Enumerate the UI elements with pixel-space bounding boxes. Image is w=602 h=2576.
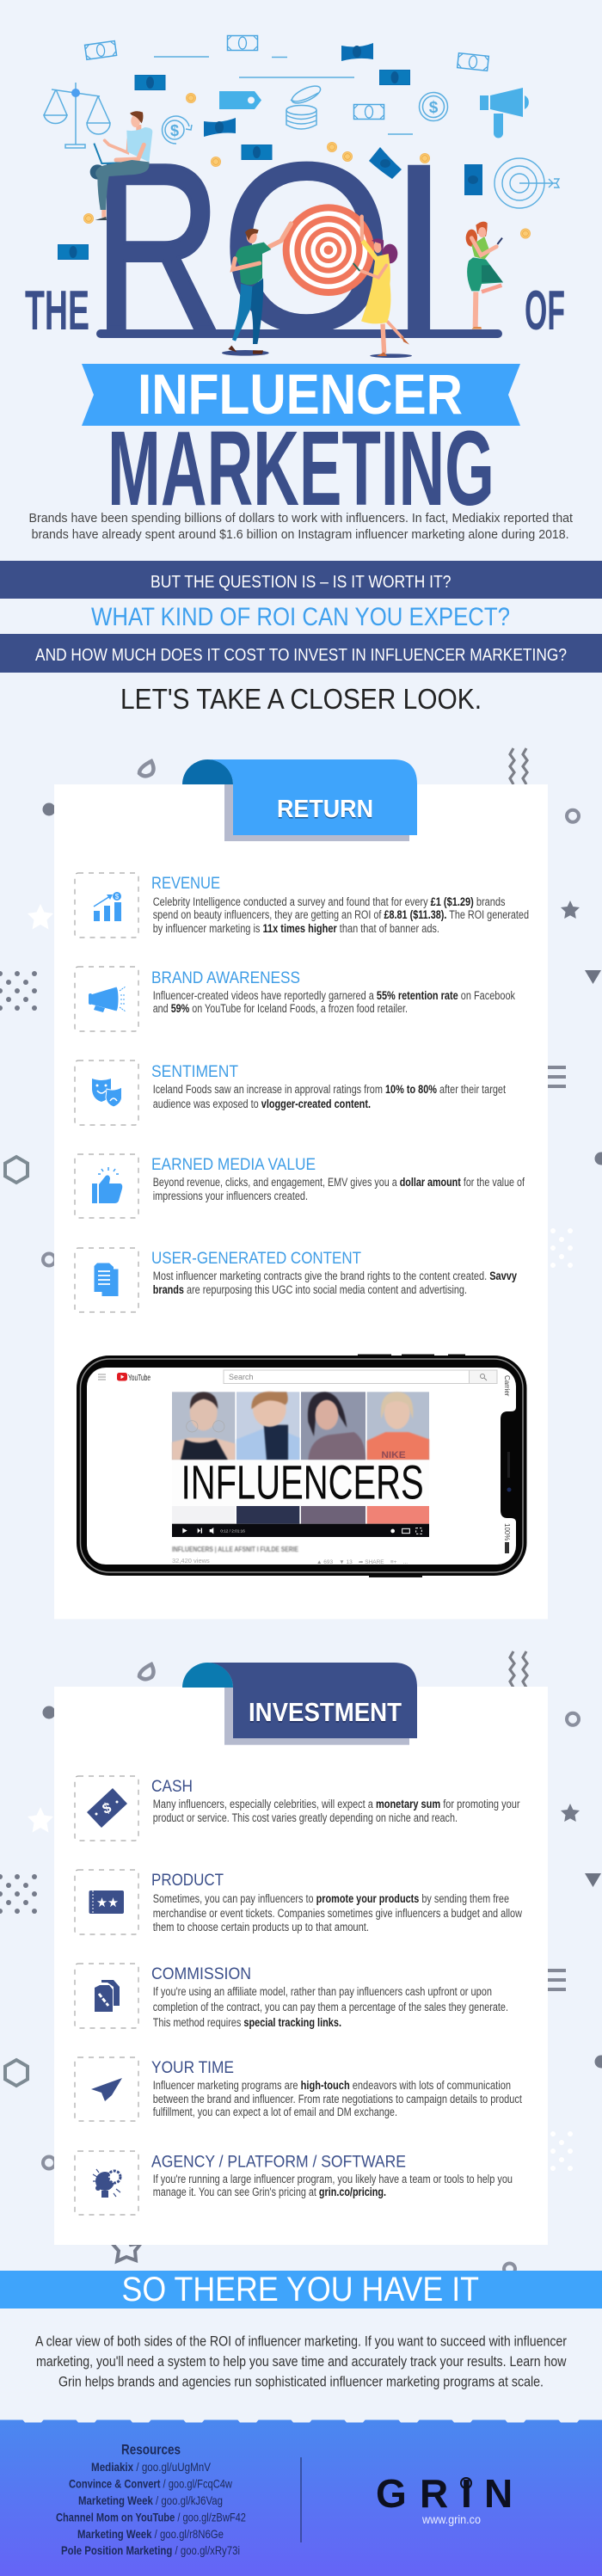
intro paragraph: Brands have been spending billions of dollars to work with influencers. In fact, Mediakix reported that: [29, 511, 574, 526]
item: revenue: spend on beauty influencers, they are getting an ROI of £8.81 ($11.38). The ROI generated: [153, 908, 529, 921]
video meta row: 32,420 views: [172, 1557, 210, 1565]
question bar 2: [0, 634, 602, 673]
video meta row: INFLUENCERS | ALLE AFSNIT I FULDE SERIE: [172, 1545, 298, 1553]
player controls: [172, 1524, 429, 1537]
closing banner: [0, 2271, 602, 2309]
item: sentiment: SENTIMENT: [151, 1063, 238, 1081]
panel: footer: [0, 2419, 602, 2576]
phone status text: 100%: [503, 1523, 511, 1540]
phone mockup with YouTube screen: [77, 1354, 526, 1577]
item: commission: This method requires special tracking links.: [153, 2016, 341, 2029]
item: brand awareness: and 59% on YouTube for Iceland Foods, a frozen food retailer.: [153, 1002, 408, 1015]
icon: theatre masks: [92, 1079, 122, 1107]
question bar 1: [0, 561, 602, 599]
tab: return: [182, 759, 417, 841]
tab: return: RETURN: [277, 796, 373, 823]
phone status text: Carrier: [503, 1375, 511, 1397]
ribbon text: INFLUENCER: INFLUENCER: [138, 363, 463, 426]
icon: revenue chart: $: [115, 893, 120, 901]
item: your time: between the brand and influencer. From rate negotiations to campaign details to product: [153, 2093, 522, 2106]
video meta row: ▲ 693 ▼ 13 ➦ SHARE ≡+ ...: [316, 1559, 408, 1565]
closing banner: SO THERE YOU HAVE IT: [122, 2271, 479, 2309]
youtube header: [98, 1370, 497, 1383]
icon: balance scale: [44, 83, 110, 148]
item: product: [75, 1870, 522, 1934]
hero money icons: $: [429, 99, 439, 117]
item: your time: fulfillment, you can expect a lot of email and DM exchange.: [153, 2106, 397, 2118]
icon: gear bulb: [93, 2169, 120, 2198]
resources list: Marketing Week / goo.gl/r8N6Ge: [77, 2527, 224, 2541]
resources list: Channel Mom on YouTube / goo.gl/zBwF42: [56, 2511, 246, 2524]
thumbnail title: INFLUENCERS: [181, 1455, 424, 1509]
item: your time: Influencer marketing programs are high-touch endeavors with lots of communication: [153, 2079, 511, 2092]
item: agency platform software: AGENCY / PLATFORM / SOFTWARE: [151, 2154, 406, 2171]
item: agency platform software: manage it. You can see Grin's pricing at grin.co/pricing.: [153, 2186, 386, 2198]
icon: ticket: [89, 1891, 124, 1914]
tab: return: RETURN: [277, 796, 373, 824]
resources list: Pole Position Marketing / goo.gl/xRy73i: [61, 2543, 240, 2557]
item: user-generated content: USER-GENERATED CONTENT: [151, 1250, 361, 1268]
tab: investment: INVESTMENT: [249, 1697, 402, 1727]
icon: documents: [95, 1263, 119, 1297]
tab: investment: [182, 1663, 417, 1745]
footer divider: [301, 2457, 302, 2542]
item: cash: [75, 1776, 520, 1841]
item: commission: If you're using an affiliate model, rather than pay influencers cash upfront or upon: [153, 1985, 492, 1998]
big ROI title letters: O: [220, 113, 393, 383]
closer look heading: LET'S TAKE A CLOSER LOOK.: [120, 684, 482, 716]
item: brand awareness: Influencer-created videos have reportedly garnered a 55% retention rate on Facebook: [153, 989, 515, 1002]
icon: revenue chart: [94, 892, 121, 921]
hero money icons: [58, 36, 530, 260]
item: user-generated content: [75, 1248, 517, 1313]
item: sentiment: audience was exposed to vlogger-created content.: [153, 1097, 371, 1110]
item: commission: [75, 1964, 508, 2029]
item: sentiment: [75, 1061, 506, 1125]
question heading: WHAT KIND OF ROI CAN YOU EXPECT?: [91, 603, 510, 631]
ribbon banner: [82, 363, 520, 426]
title word: THE: THE: [25, 279, 89, 341]
title word: OF: OF: [525, 279, 565, 341]
youtube header: Search: [229, 1373, 254, 1381]
item: cash: Many influencers, especially celebrities, will expect a monetary sum for promoting your: [153, 1798, 520, 1811]
website text: www.grin.co: [421, 2512, 481, 2526]
panel: return: [54, 759, 548, 1619]
resources list: Resources: [121, 2441, 181, 2458]
icon: thumbs up: [92, 1167, 122, 1203]
item: revenue: REVENUE: [151, 875, 220, 893]
icon: outline target with arrow: [494, 158, 559, 208]
video meta row: [172, 1545, 408, 1565]
illustration: archery target held by two people: [222, 204, 412, 358]
big ROI title letters: R: [94, 115, 222, 378]
item: user-generated content: brands are repurposing this UGC into social media content and advertising.: [153, 1283, 467, 1296]
item: your time: [75, 2057, 522, 2121]
icon: ticket: ★★: [96, 1896, 119, 1910]
item: brand awareness: [75, 967, 515, 1031]
background decorative shapes: investment section: [0, 1651, 602, 2171]
big ROI title letters: [94, 113, 452, 383]
man in green shirt: [222, 224, 291, 356]
icon: megaphone: [480, 88, 529, 138]
item: earned media value: [75, 1154, 525, 1218]
resources list: [56, 2441, 246, 2557]
star behind investment card: [112, 2236, 141, 2261]
item: product: PRODUCT: [151, 1872, 224, 1890]
icon: banknote: $: [100, 1799, 114, 1817]
hero money icons: $: [170, 122, 179, 139]
illustration: man sitting with laptop: [90, 111, 152, 220]
icon: linked documents: [95, 1980, 120, 2012]
resources list: Mediakix / goo.gl/uUgMnV: [91, 2460, 212, 2474]
tab: investment: INVESTMENT: [249, 1698, 402, 1729]
item: product: merchandise or event tickets. Companies sometimes give influencers a budget and allow: [153, 1907, 522, 1920]
closing paragraph: [35, 2334, 567, 2389]
influencer photo panels: NIKE: [381, 1450, 406, 1460]
item: agency platform software: If you're running a large influencer program, you likely have a team or tools to help you: [153, 2173, 513, 2186]
item: earned media value: Beyond revenue, clicks, and engagement, EMV gives you a dollar amount for the value of: [153, 1176, 525, 1189]
resources list: Convince & Convert / goo.gl/FcqC4w: [69, 2477, 233, 2491]
item: cash: CASH: [151, 1778, 193, 1796]
item: cash: product or service. This cost varies greatly depending on niche and reach.: [153, 1811, 458, 1824]
question bar 1: BUT THE QUESTION IS – IS IT WORTH IT?: [150, 572, 451, 592]
influencer photo panels: [172, 1392, 429, 1460]
item: earned media value: impressions your influencers created.: [153, 1190, 308, 1202]
item: revenue: by influencer marketing is 11x times higher than that of banner ads.: [153, 922, 439, 935]
woman in yellow dress: [353, 217, 412, 358]
icon: banknote: [87, 1788, 127, 1828]
panel: investment: [54, 1663, 548, 2245]
icon: megaphone: [89, 987, 126, 1012]
item: product: them to choose certain products up to that amount.: [153, 1921, 369, 1934]
item: product: Sometimes, you can pay influencers to promote your products by sending them free: [153, 1892, 509, 1905]
intro paragraph: [29, 511, 574, 542]
item: sentiment: Iceland Foods saw an increase in approval ratings from 10% to 80% after their target: [153, 1083, 506, 1096]
item: brand awareness: BRAND AWARENESS: [151, 969, 300, 987]
item: your time: YOUR TIME: [151, 2059, 234, 2077]
ring behind closing bar: [504, 2264, 515, 2274]
item: commission: completion of the contract, you can pay them a percentage of the sales they generate.: [153, 2001, 508, 2013]
intro paragraph: brands have already spent around $1.6 billion on Instagram influencer marketing alone during 2018.: [32, 527, 569, 542]
item: user-generated content: Most influencer marketing contracts give the brand rights to the content created. Savvy: [153, 1270, 517, 1282]
icon: paper plane: [91, 2078, 122, 2101]
GRIN logo: GRIN: [376, 2471, 513, 2516]
illustration: woman with phone: [466, 222, 503, 329]
item: revenue: Celebrity Intelligence conducted a survey and found that for every £1 ($1.29) brands: [153, 895, 506, 908]
big ROI title letters: I: [385, 113, 452, 380]
resources list: Marketing Week / goo.gl/kJ6Vag: [78, 2493, 223, 2507]
item: earned media value: EARNED MEDIA VALUE: [151, 1156, 316, 1174]
baseline bar under ROI: [96, 329, 502, 338]
item: agency platform software: [75, 2151, 513, 2215]
youtube header: YouTube: [128, 1374, 150, 1383]
background decorative shapes: return section: [0, 748, 602, 1268]
item: revenue: [75, 873, 529, 938]
phone status text: [503, 1375, 511, 1553]
item: commission: COMMISSION: [151, 1965, 251, 1983]
video thumbnail: [172, 1392, 429, 1537]
player controls: 0:12 / 2:01:16: [220, 1529, 245, 1534]
